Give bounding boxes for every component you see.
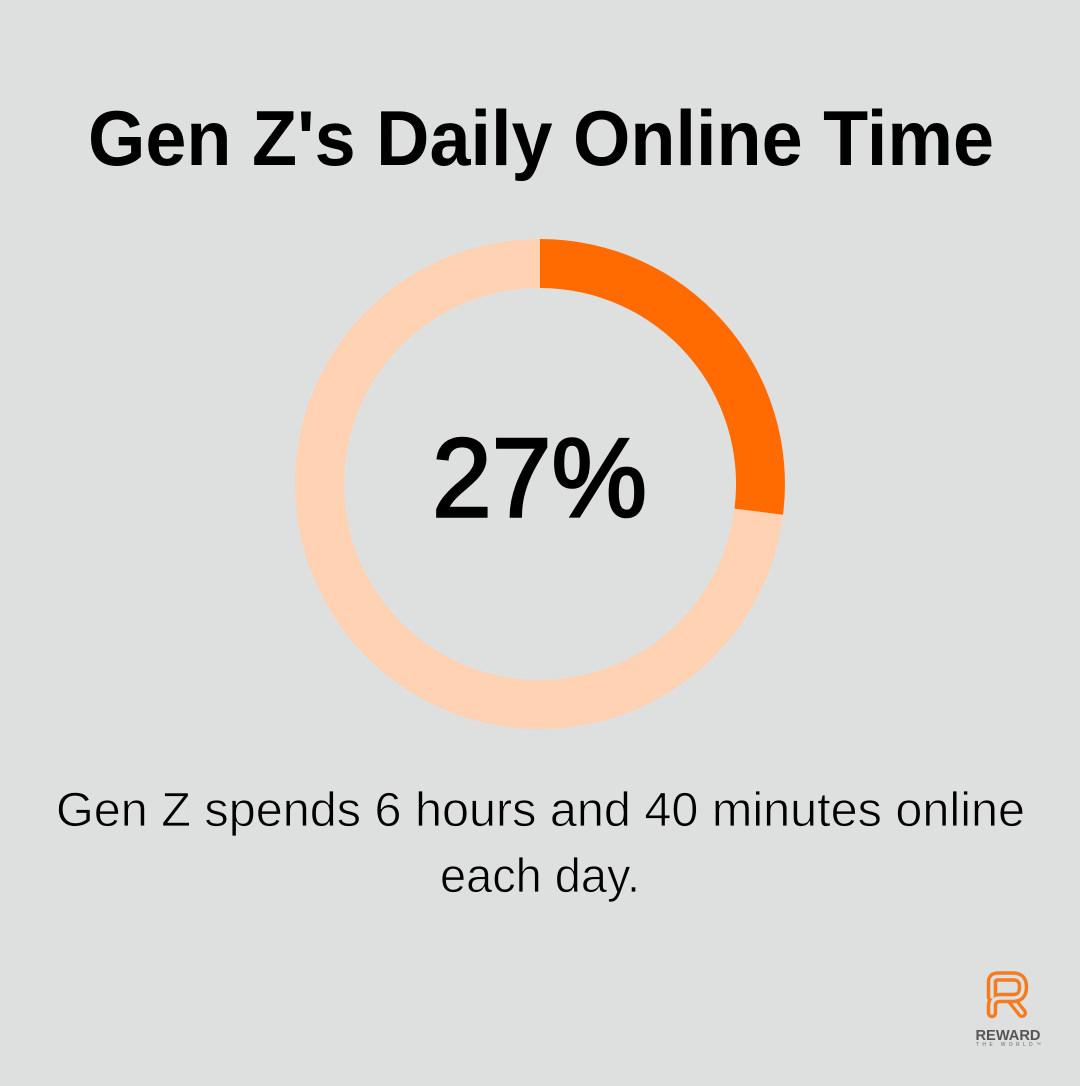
logo wordmark: REWARD [976,1027,1041,1044]
donut value segment [540,239,785,515]
donut chart: 27% [320,239,785,704]
donut track [320,264,760,704]
logo tagline: THE WORLD™ [976,1042,1041,1048]
title: Gen Z's Daily Online Time [88,94,994,182]
description text: each day. [440,850,640,903]
logo icon: R mark [992,976,1023,1013]
logo: Reward the World [976,976,1041,1048]
center percentage: 27% [432,416,647,540]
description text: Gen Z spends 6 hours and 40 minutes online [56,784,1025,837]
description text [56,784,1025,903]
